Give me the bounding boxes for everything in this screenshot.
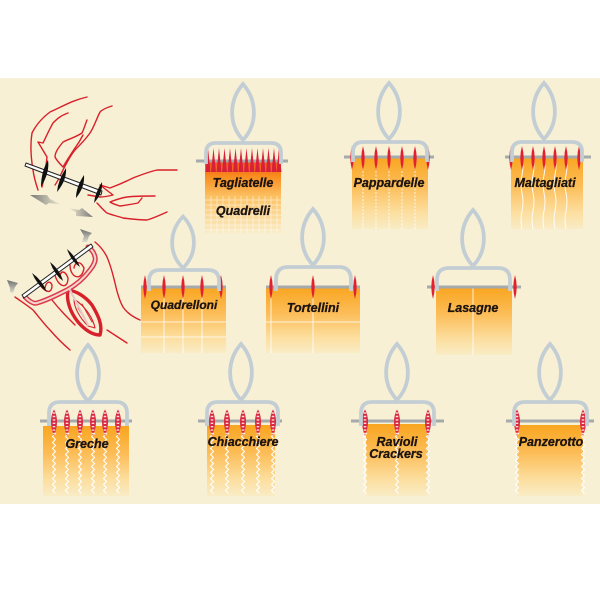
icon: cutter bar: [22, 244, 93, 298]
arrow: sideways motion: [30, 195, 93, 217]
arrow: up-right: [80, 229, 92, 242]
cutter: Panzerotto: Panzerotto: [519, 435, 584, 449]
cutter: Lasagne: Lasagne: [448, 301, 498, 315]
cutter: Maltagliati: [505, 83, 591, 229]
cutter: Tagliatelle / Quadrelli: [196, 84, 288, 233]
cutter: Ravioli Crackers: Ravioli: [376, 435, 418, 449]
cutter: Tortellini: [266, 209, 360, 353]
cutter: Chiacchiere: Chiacchiere: [208, 435, 278, 449]
cutter: Greche: [40, 345, 132, 496]
cutter: Chiacchiere: [198, 344, 282, 496]
cutter: Quadrelloni: Quadrelloni: [151, 298, 218, 312]
cutter: Pappardelle: Pappardelle: [354, 176, 424, 190]
cutter: Greche: Greche: [65, 437, 109, 451]
cutter: Pappardelle: [344, 83, 434, 229]
cutter: Lasagne: [427, 210, 521, 355]
background panel: [0, 78, 600, 504]
cutter: Quadrelloni: [141, 216, 226, 353]
cutter: Ravioli Crackers: [351, 344, 444, 496]
icon: cutter bar: [25, 160, 102, 203]
cutter: Ravioli Crackers: Crackers: [369, 447, 423, 461]
cutter: Maltagliati: Maltagliati: [514, 176, 576, 190]
illustration: hands holding cutter sideways: [25, 97, 177, 220]
illustration: hands gripping cutter: [15, 242, 140, 350]
arrow: up-left: [7, 280, 18, 293]
icon: ring handle: [67, 290, 101, 335]
cutter: Panzerotto: [506, 344, 594, 496]
cutter: Tagliatelle / Quadrelli: Tagliatelle: [213, 176, 273, 190]
cutter: Tortellini: Tortellini: [287, 301, 340, 315]
cutter: Tagliatelle / Quadrelli: Quadrelli: [216, 204, 271, 218]
